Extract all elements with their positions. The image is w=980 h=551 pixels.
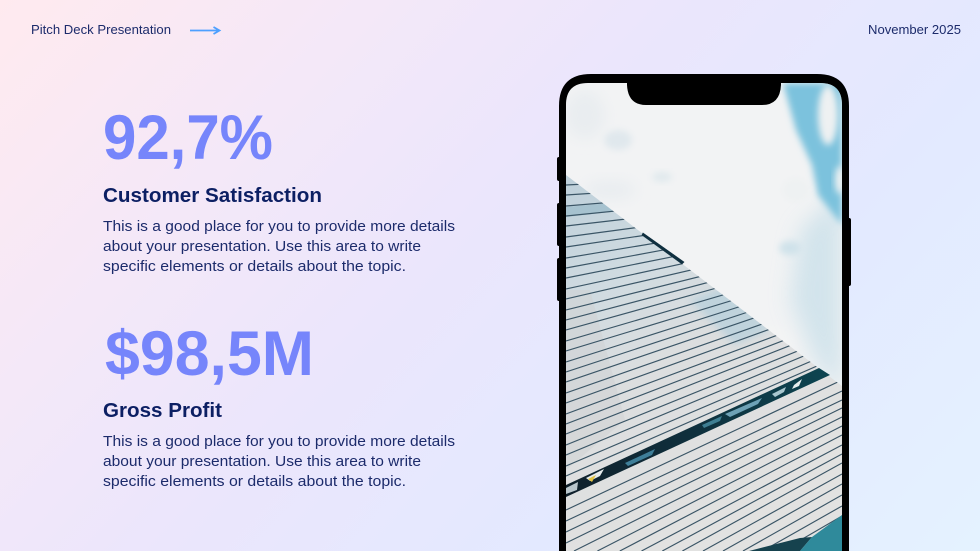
stat description: specific elements or details about the topic. (103, 473, 406, 490)
date label: November 2025 (868, 23, 961, 37)
stat block: gross profit (103, 319, 455, 490)
header label: Pitch Deck Presentation (31, 23, 171, 37)
building facade (566, 170, 842, 551)
icon: arrow (190, 27, 220, 34)
stat heading: Customer Satisfaction (103, 185, 322, 207)
stat description (103, 218, 455, 275)
teal glass corner (749, 515, 842, 551)
grey facade panel (566, 290, 625, 470)
stat value: 92,7% (103, 103, 273, 173)
phone screen photo: building and sky (565, 83, 845, 551)
blue reflection along roof edge (690, 285, 770, 345)
blue reflection strip on slats (566, 204, 613, 217)
sky (565, 83, 845, 395)
dark window band (566, 368, 830, 497)
stat description: about your presentation. Use this area to write (103, 238, 421, 255)
stat description: This is a good place for you to provide more details (103, 433, 455, 450)
stat description: This is a good place for you to provide more details (103, 218, 455, 235)
stat description: about your presentation. Use this area to write (103, 453, 421, 470)
phone side buttons (557, 157, 851, 301)
stat heading: Gross Profit (103, 400, 222, 422)
small dark roof band (642, 233, 684, 264)
facade slats (566, 171, 842, 551)
stat description: specific elements or details about the topic. (103, 258, 406, 275)
stat block: customer satisfaction (103, 103, 455, 275)
stat description (103, 433, 455, 490)
stat value: $98,5M (105, 319, 314, 389)
phone mockup (557, 74, 851, 551)
phone body (559, 74, 849, 551)
